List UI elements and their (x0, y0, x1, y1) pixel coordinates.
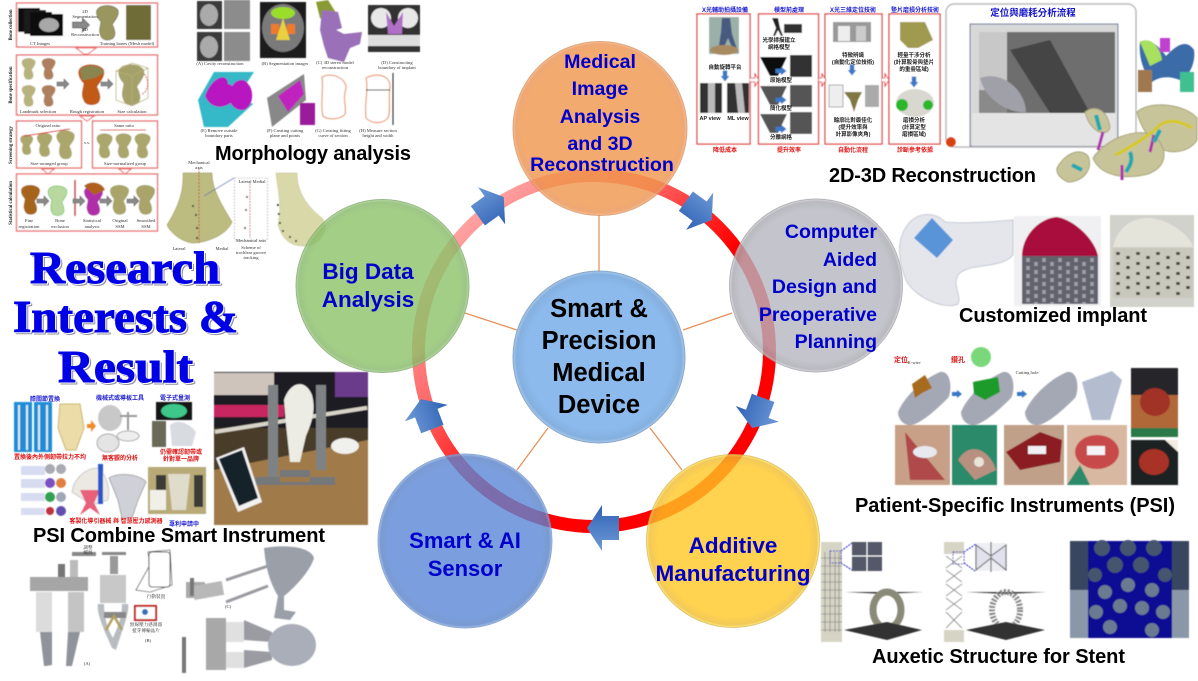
reconstruction captions: 自動化流程 (838, 146, 868, 154)
instrument captions: 無線壓力感測器 (130, 621, 162, 628)
panel: 2D-3D reconstruction flow (697, 4, 1197, 182)
morphology captions: (C) 3D stereo model (316, 60, 355, 65)
implant fluoroscopy images (833, 22, 871, 42)
surgical photos (895, 425, 1127, 485)
workflow captions: Landmark selection (20, 109, 57, 114)
femur captions: Mechanical (188, 160, 210, 165)
femur with pink guide (72, 464, 109, 515)
implant meshes (760, 55, 812, 134)
node: medical image analysis: Image (572, 78, 628, 100)
instrument drawing B (98, 552, 128, 650)
PSI captions: 鑽孔 (951, 355, 965, 364)
node: computer aided design: Aided (823, 249, 877, 271)
blue arrow (721, 70, 729, 82)
side labels: Bone collection (9, 9, 14, 41)
node: smart and precision medical device: Smart & (550, 295, 648, 323)
arrow: green to orange (464, 178, 517, 234)
printed implant render (1014, 216, 1101, 306)
node: big data analysis (296, 200, 469, 372)
liver vessel lobes (1057, 105, 1197, 182)
connector chevrons (42, 48, 131, 174)
panel: customized implant images (900, 214, 1194, 307)
reconstruction captions: 提升效率 (777, 146, 801, 154)
CT images stack (18, 8, 63, 36)
instrument captions: 無客觀的分析 (102, 454, 138, 462)
panel box: size-normalized group (92, 121, 158, 168)
instrument captions (14, 394, 232, 666)
node: medical image analysis: Medical (564, 51, 636, 73)
femur captions: trochlear groove (236, 250, 266, 255)
phone in hand (136, 550, 172, 592)
box 3 (825, 14, 882, 144)
groove tracking scheme (234, 178, 268, 240)
node: computer aided design: Design and (772, 276, 877, 298)
workflow captions: Original ratio (36, 123, 61, 128)
auxetic ring compression (966, 592, 1046, 640)
plain unit cell (841, 542, 882, 571)
arrow: gray to yellow (731, 390, 785, 436)
node: computer aided design: Planning (795, 331, 877, 353)
workflow captions: Training bones (Mesh model) (100, 41, 155, 46)
PSI captions (894, 355, 1038, 375)
heading: auxetic structure for stent: Auxetic Structure for Stent (872, 646, 1125, 668)
PSI captions: Cutting hole (1016, 370, 1038, 375)
workflow captions: SSM (141, 224, 151, 229)
reconstruction captions: 降低成本 (713, 146, 737, 154)
workflow captions: Rough registration (70, 109, 105, 114)
node: computer aided design: Computer (785, 221, 877, 243)
node: big data analysis: Analysis (322, 287, 414, 312)
node: medical image analysis: and 3D (567, 133, 633, 155)
side labels: Statistical calculation (9, 181, 14, 225)
node: medical image analysis: Reconstruction (530, 154, 674, 176)
instrument captions: 仍需確認韌帶或 (160, 448, 202, 456)
reconstruction captions: 診斷參考依據 (897, 146, 933, 154)
node: smart and AI sensor (378, 454, 552, 628)
auxetic strip (944, 542, 964, 642)
femur side view (276, 173, 325, 246)
workflow captions: Reconstruction (71, 32, 100, 37)
guide on tibia models (898, 347, 1122, 425)
wear area (896, 89, 934, 117)
reconstruction captions: (提升效率與 (838, 123, 868, 131)
workflow captions: Segmentation (72, 14, 98, 19)
instrument drawing A (30, 552, 96, 666)
workflow captions: v.s. (84, 140, 90, 145)
morphology captions: (D) Constructing (381, 60, 413, 65)
segmentation CT (260, 2, 306, 58)
morphology captions (196, 60, 416, 138)
CT slices (197, 0, 250, 61)
side labels (9, 9, 14, 225)
plain ring compression (844, 592, 923, 640)
arrow: orange to gray (672, 183, 725, 239)
morphology captions: (F) Creating cutting (267, 128, 304, 133)
cyan magenta volumes (198, 72, 254, 127)
workflow captions: 3D (82, 27, 88, 32)
femur captions: Medial (252, 179, 266, 184)
reconstruction captions: 特徵辨識 (842, 51, 864, 59)
instrument drawing D (182, 618, 316, 673)
gray arrow (73, 18, 89, 32)
femur captions (172, 160, 266, 260)
workflow captions: Same ratio (114, 123, 135, 128)
statistical calculation bones (21, 185, 40, 215)
landmark bones (22, 58, 35, 107)
heading: PSI combine smart instrument: PSI Combine Smart Instrument (33, 525, 325, 547)
morphology captions: height and width (363, 133, 394, 138)
bluetooth sensor chip (135, 606, 156, 620)
reconstruction captions: 網格模型 (768, 43, 790, 51)
morphology captions: (H) Measure section (359, 128, 397, 133)
node: medical image analysis: Analysis (560, 106, 640, 128)
connector chevrons (750, 74, 889, 86)
node: smart and precision medical device: Medical (552, 359, 646, 387)
morphology captions: plane and points (270, 133, 300, 138)
diagram: spokes (465, 215, 732, 470)
instrument captions: 針對單一品牌 (163, 455, 199, 463)
size calculation box (116, 63, 148, 106)
femur captions: Scheme of (241, 245, 261, 250)
plain strip (821, 542, 842, 642)
workflow captions: SSM (115, 224, 125, 229)
inner curve outline (322, 75, 346, 119)
tibial insert (900, 22, 933, 48)
desk prototype photo (214, 372, 368, 525)
workflow captions: Original (112, 218, 128, 223)
workflow captions: CT Images (30, 41, 50, 46)
node: additive manufacturing: Additive (689, 533, 777, 558)
size-normalized bones (97, 133, 150, 158)
instrument captions: (B) (145, 638, 152, 643)
node: big data analysis: Big Data (322, 259, 414, 284)
node: computer aided design: Preoperative (759, 304, 877, 326)
wear analysis software window (946, 4, 1136, 147)
morphology captions: boundary of implant (378, 65, 416, 70)
instrument captions: 藍芽傳輸晶片 (132, 627, 160, 634)
heading: 2D-3D reconstruction: 2D-3D Reconstruction (829, 165, 1036, 187)
reconstruction captions: 輪廓比對最佳化 (834, 116, 873, 124)
node: smart and precision medical device: Precision (542, 327, 656, 355)
reconstruction captions: 磨損區域) (902, 130, 926, 138)
workflow captions: Size-normalized group (104, 161, 147, 166)
reconstruction captions: 光學掃描建立 (762, 36, 796, 44)
heading: patient-specific instruments: Patient-Specific Instruments (PSI) (855, 495, 1175, 517)
instrument captions: 專利申請中 (169, 520, 199, 528)
instrument drawing C (186, 546, 314, 620)
instrument captions: 調整 (83, 544, 93, 551)
contour registration (829, 85, 879, 112)
panel box: size-arranged group (16, 121, 82, 168)
panel: femur groove tracking (167, 160, 325, 260)
arrow: yellow to blue (587, 505, 619, 551)
electronic measurement (152, 402, 196, 447)
x-rays (700, 83, 749, 113)
reconstruction captions: (計算股骨與墊片 (894, 58, 934, 66)
box 2 (758, 14, 818, 144)
arrow: blue to green (399, 391, 454, 437)
morphology captions: boundary parts (205, 133, 233, 138)
heading: customized implant: Customized implant (959, 305, 1147, 327)
morphology captions: curve of section (318, 133, 348, 138)
femur with blue pad (900, 214, 1013, 306)
reconstruction captions: 輕量干涉分析 (897, 51, 931, 59)
instrument captions: (A) (84, 661, 91, 666)
PSI captions: 定位 (894, 355, 908, 364)
node: smart and precision medical device (513, 271, 685, 443)
mesh model (126, 5, 151, 40)
rough registration bone (78, 64, 104, 105)
reconstruction captions: 自動旋轉平台 (708, 63, 742, 71)
workflow captions: registration (19, 224, 40, 229)
title: research interests and result: Interests & (13, 292, 238, 342)
instrument captions: 電子式量測 (160, 394, 190, 402)
reconstruction captions: X光輔助拍攝設備 (702, 6, 748, 14)
panel box: bone specification (16, 55, 158, 115)
side labels: Screening strategy (9, 125, 14, 164)
workflow captions: Size calculation (117, 109, 147, 114)
measured curve outline (366, 73, 393, 125)
morphology captions: (A) Cavity reconstruction (196, 61, 244, 66)
femur captions: tracking (243, 255, 259, 260)
node: smart and precision medical device: Device (558, 391, 640, 419)
tracking dots (193, 197, 296, 241)
mechanical tool (97, 405, 139, 452)
panel box: statistical calculation (16, 174, 158, 231)
title: research interests and result: Result (58, 342, 193, 392)
node: smart and AI sensor: Smart & AI (409, 528, 521, 553)
diagram: central ring (418, 176, 770, 526)
node: additive manufacturing (646, 454, 820, 628)
workflow captions (19, 9, 156, 229)
stent mesh simulation (1070, 540, 1189, 638)
box 4 (889, 14, 940, 144)
instrument captions: 機械式或導板工具 (96, 394, 144, 402)
boundary CT (368, 5, 420, 52)
instrument captions: 客製化導引器械 與 智慧壓力感測器 (69, 517, 163, 525)
workflow captions: Smoothed (137, 218, 156, 223)
morphology captions: (B) Segmentation images (262, 61, 309, 66)
prototype photo (148, 467, 206, 514)
orange arrow (87, 420, 96, 432)
x-ray stand photo (709, 17, 739, 55)
instrument captions: (C) (225, 604, 232, 609)
reconstruction captions: 定位與磨耗分析流程 (990, 7, 1076, 19)
size-arranged bones (20, 130, 75, 159)
reconstruction captions (700, 6, 1076, 154)
node: smart and AI sensor: Sensor (428, 556, 503, 581)
title: research interests and result (13, 243, 238, 392)
instrument captions: 膝關節置換 (30, 395, 60, 403)
panel: auxetic stent images (821, 540, 1189, 642)
blue leg x-rays (14, 402, 52, 452)
workflow captions: analysis (85, 224, 100, 229)
instrument captions: 螺絲 (83, 549, 93, 556)
heading: morphology analysis: Morphology analysis (215, 143, 411, 165)
workflow captions: Statistical (83, 218, 102, 223)
workflow captions: Size-arranged group (30, 161, 68, 166)
reconstruction captions: 墊片磨損分析技術 (891, 6, 939, 14)
tibia with purple layer (109, 475, 146, 518)
PSI captions: K-wire (907, 360, 921, 365)
reconstruction captions: 分離網格 (770, 133, 792, 141)
reconstruction captions: (自動化定位技術) (832, 58, 874, 66)
title: research interests and result: Research (30, 243, 220, 293)
knee ligaments (58, 404, 84, 450)
panel: PSI combine smart instrument images (14, 372, 368, 673)
morphology captions: (G) Creating fitting (315, 128, 352, 133)
workflow captions: Bone (55, 218, 65, 223)
reconstruction captions: 的重疊區域) (899, 65, 929, 73)
reconstruction captions: 計算影像夾角) (836, 130, 871, 138)
panel: patient-specific instruments images (894, 347, 1178, 485)
panel box: bone collection (16, 3, 158, 47)
side labels: Bone specification (9, 66, 14, 104)
panel: morphology analysis images (196, 0, 420, 138)
intraoperative photos (1131, 368, 1178, 485)
printed implant photo (1110, 215, 1194, 307)
pelvis model (1138, 38, 1194, 92)
femur captions: Lateral (238, 179, 252, 184)
workflow steps (21, 466, 45, 515)
reconstruction captions: AP view (700, 116, 721, 122)
reconstruction captions: 磨損分析 (903, 116, 925, 124)
femur captions: Mechanical axis (236, 238, 266, 243)
node: medical image analysis (513, 42, 687, 216)
reconstruction captions: ML view (727, 116, 749, 122)
auxetic unit cell (964, 542, 1006, 572)
cutting plane model (267, 74, 315, 127)
femur front view (167, 173, 232, 243)
femur captions: Medial (215, 246, 229, 251)
mechanical axis (198, 168, 200, 243)
bone from CT (96, 6, 118, 40)
instrument captions: 行動裝置 (147, 593, 166, 600)
workflow captions: 2D (82, 9, 88, 14)
scanner (772, 18, 802, 36)
reconstruction captions: (計算定型 (902, 123, 926, 131)
morphology captions: (E) Remove outside (201, 128, 237, 133)
reconstruction captions: X光三維定位技術 (830, 6, 876, 14)
instrument captions: 置換後內外側韌帶拉力不均 (14, 453, 86, 461)
femur captions: axis (195, 165, 203, 170)
reconstruction captions: 模型前處理 (774, 6, 804, 14)
box 1 (697, 14, 750, 144)
reconstruction captions: 原始模型 (770, 76, 792, 84)
workflow captions: exclusion (51, 224, 70, 229)
femur captions: Lateral (172, 246, 186, 251)
node: computer aided design (730, 199, 902, 372)
node: additive manufacturing: Manufacturing (656, 561, 810, 586)
morphology captions: reconstruction (322, 65, 349, 70)
panel: bone statistical shape workflow (9, 3, 158, 231)
workflow captions: Fine (25, 218, 33, 223)
reconstruction captions: 簡化模型 (770, 104, 792, 112)
purple 3D model (316, 0, 362, 62)
